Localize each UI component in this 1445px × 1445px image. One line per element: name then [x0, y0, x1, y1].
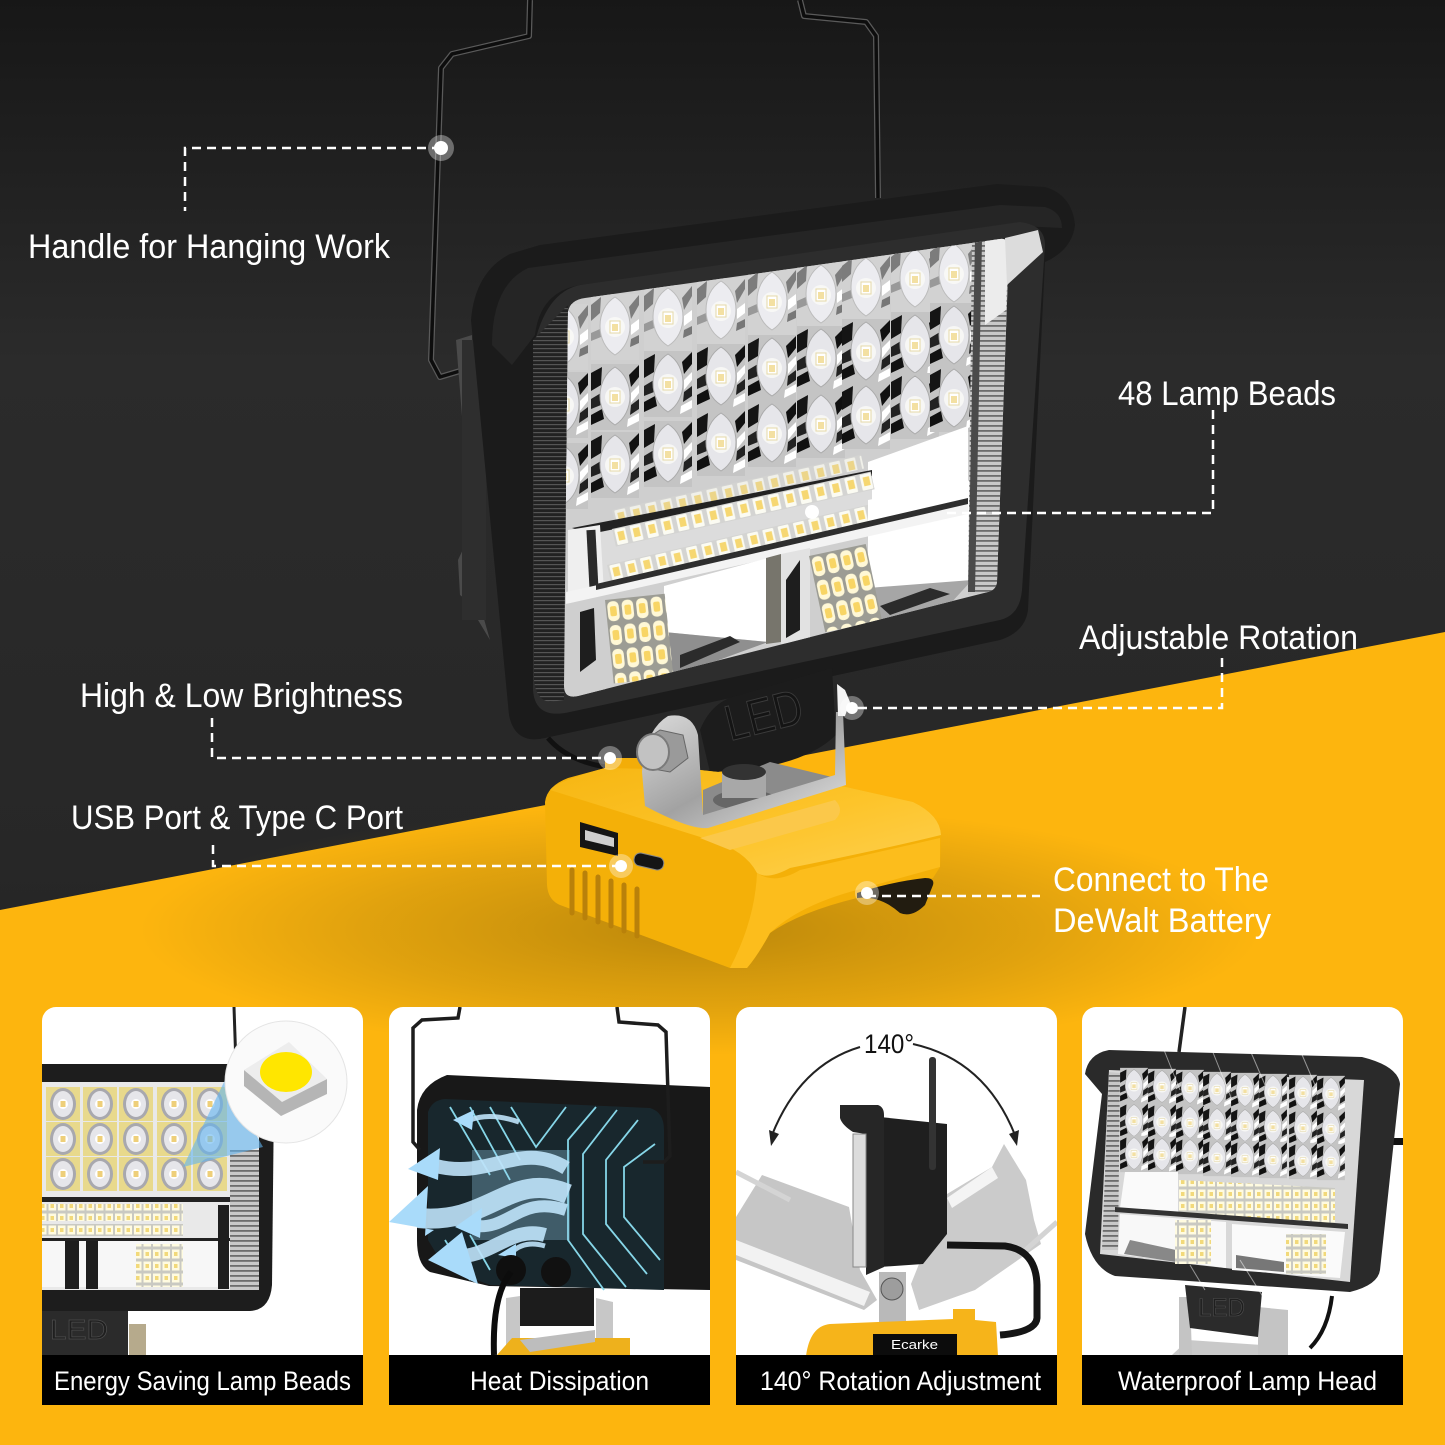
vent slots — [572, 870, 637, 936]
ground shadow under base — [140, 805, 1260, 1055]
panel: 140 degree rotation — [736, 1007, 1057, 1405]
lamp back — [417, 1075, 710, 1290]
blue beam — [183, 1080, 263, 1167]
beads rows — [540, 241, 978, 509]
callout: USB and type C port — [71, 799, 633, 878]
LED embossed text: LED — [719, 678, 808, 752]
panel: energy saving lamp beads — [42, 1007, 363, 1355]
rain streaks — [1160, 1040, 1315, 1300]
ribbed left band — [533, 305, 568, 702]
round buttons — [496, 1255, 526, 1285]
base top face — [550, 768, 941, 876]
caption bar: energy saving: Energy Saving Lamp Beads — [54, 1366, 351, 1396]
lamp rear housing — [456, 335, 490, 640]
LED embossed text: LED — [1198, 1294, 1245, 1322]
type C port — [633, 852, 665, 871]
LED cluster lower left — [605, 594, 673, 684]
lower right reflector — [1232, 1224, 1345, 1278]
yellow base — [806, 1309, 998, 1356]
divider — [1115, 1207, 1348, 1229]
logo text: Ecarke — [891, 1337, 938, 1352]
left reflector — [1120, 1172, 1178, 1212]
callout: connect to the DeWalt battery: Connect to The — [1053, 861, 1269, 899]
upper right white reflector — [868, 426, 968, 505]
LED embossed text: LED — [50, 1314, 108, 1345]
product: work light — [456, 184, 1075, 968]
mount — [1185, 1285, 1262, 1337]
caption bar: rotation: 140° Rotation Adjustment — [760, 1366, 1041, 1396]
yellow background band — [0, 632, 1445, 1445]
handle — [929, 1057, 936, 1170]
right silver band — [968, 238, 1009, 595]
lower right white reflector — [868, 480, 972, 590]
mount — [520, 1288, 594, 1326]
callout: handle for hanging work: Handle for Hanging Work — [28, 228, 391, 266]
callout: handle for hanging work — [28, 135, 454, 266]
caption bar: energy saving — [42, 1355, 363, 1405]
lamp frame — [1085, 1050, 1400, 1292]
cable — [494, 1272, 511, 1355]
lower right dark chrome — [868, 580, 972, 625]
callout: 48 lamp beads: 48 Lamp Beads — [1118, 375, 1336, 413]
callout: 48 lamp beads — [945, 375, 1336, 513]
callout: high and low brightness — [80, 677, 622, 770]
bolt and nut — [637, 730, 688, 772]
dark band — [42, 1197, 230, 1202]
callout: connect to the DeWalt battery — [855, 861, 1271, 940]
lower middle chrome — [781, 548, 810, 644]
nut — [129, 1324, 146, 1355]
USB port — [580, 822, 618, 856]
cable — [1310, 1296, 1332, 1348]
caption bar: waterproof — [1082, 1355, 1403, 1405]
lens strip — [853, 1134, 866, 1267]
chip magnifier — [225, 1021, 347, 1143]
blue arrow heads — [389, 1110, 516, 1284]
LED cluster lower middle — [809, 544, 882, 632]
glass corner glare — [1005, 230, 1043, 285]
base floor — [1172, 1340, 1262, 1355]
yellow glowing beads — [46, 1087, 227, 1191]
bracket shadow reflection — [700, 800, 840, 850]
dark band lower — [42, 1238, 230, 1241]
lamp close-up frame — [30, 1064, 274, 1311]
right silver column — [230, 1150, 259, 1290]
dark pillars — [65, 1205, 229, 1289]
left chrome pillar — [568, 525, 604, 592]
lens interior — [540, 238, 1009, 700]
side stub — [1392, 1138, 1403, 1145]
LED row 2 — [607, 505, 872, 583]
blue air arrows — [418, 1116, 568, 1256]
lens glare dot — [805, 505, 819, 519]
base block rear — [605, 758, 643, 790]
angle label: 140° — [864, 1029, 914, 1059]
fin panel — [428, 1099, 664, 1290]
glass band — [533, 222, 1045, 714]
lamp hood — [840, 1105, 884, 1275]
lower LED cluster — [136, 1244, 183, 1287]
blue glow — [472, 1150, 570, 1240]
callout: high and low brightness: High & Low Brightness — [80, 677, 403, 715]
lens — [1100, 1070, 1364, 1282]
base body — [545, 768, 941, 968]
mini bead rows — [1120, 1068, 1345, 1180]
mount arm — [700, 668, 836, 772]
rotation arc with arrows — [772, 1044, 1015, 1135]
LED strips — [42, 1204, 183, 1221]
lower reflector — [42, 1241, 230, 1287]
lower left white reflector — [664, 558, 768, 642]
mount plate — [879, 1272, 906, 1322]
callout: USB and type C port: USB Port & Type C Port — [71, 799, 404, 837]
caption bar: waterproof: Waterproof Lamp Head — [1118, 1366, 1377, 1396]
LED cluster right — [1286, 1234, 1326, 1274]
arrow heads — [769, 1130, 1019, 1146]
pivot post — [713, 764, 777, 810]
icon: hanging wire handle — [431, 0, 878, 377]
base front corner shade — [730, 838, 940, 968]
steel bracket — [642, 712, 846, 828]
lower left reflector — [1118, 1214, 1226, 1268]
LED cluster left — [1175, 1220, 1211, 1264]
left silver column — [1102, 1072, 1120, 1250]
vertical divider — [766, 554, 781, 644]
caption bar: heat dissipation: Heat Dissipation — [470, 1366, 649, 1396]
caption bar: heat dissipation — [389, 1355, 710, 1405]
lower dark chrome — [1124, 1240, 1176, 1262]
lens base — [564, 239, 1009, 697]
side knob — [837, 684, 850, 716]
cable — [947, 1245, 1037, 1335]
panel: heat dissipation — [389, 1007, 710, 1355]
callout: adjustable rotation: Adjustable Rotation — [1079, 619, 1358, 657]
divider band — [566, 504, 968, 604]
cable — [548, 738, 612, 768]
callout: connect to the DeWalt battery: DeWalt Battery — [1053, 902, 1271, 940]
LED strip — [1179, 1180, 1335, 1224]
cooling fins — [445, 1107, 660, 1290]
mount — [42, 1311, 128, 1355]
lower left chrome — [566, 688, 606, 697]
bracket plates — [1179, 1297, 1288, 1355]
ghost lamp left — [736, 1175, 877, 1310]
lamp visor highlight — [492, 205, 1062, 365]
logo plate — [873, 1334, 957, 1356]
ghost lamp right — [911, 1144, 1041, 1310]
right top glare — [985, 238, 1009, 325]
callout: adjustable rotation — [840, 619, 1358, 720]
dark line above strip — [572, 470, 872, 534]
lower left dark chrome — [664, 632, 766, 674]
bracket floor — [703, 762, 836, 818]
nut — [881, 1278, 903, 1300]
bracket floor — [520, 1330, 595, 1352]
faint LED row — [612, 455, 864, 524]
bracket plates — [506, 1296, 613, 1354]
lamp back body — [880, 1117, 947, 1267]
lens — [30, 1082, 259, 1290]
strip background — [592, 476, 872, 590]
battery slot — [857, 878, 933, 914]
caption bar: rotation — [736, 1355, 1057, 1405]
wire handle — [413, 1007, 670, 1162]
LED row 1 — [612, 472, 875, 547]
panel: waterproof lamp head — [1082, 1007, 1403, 1405]
lamp frame — [471, 184, 1075, 739]
yellow base — [497, 1338, 630, 1355]
